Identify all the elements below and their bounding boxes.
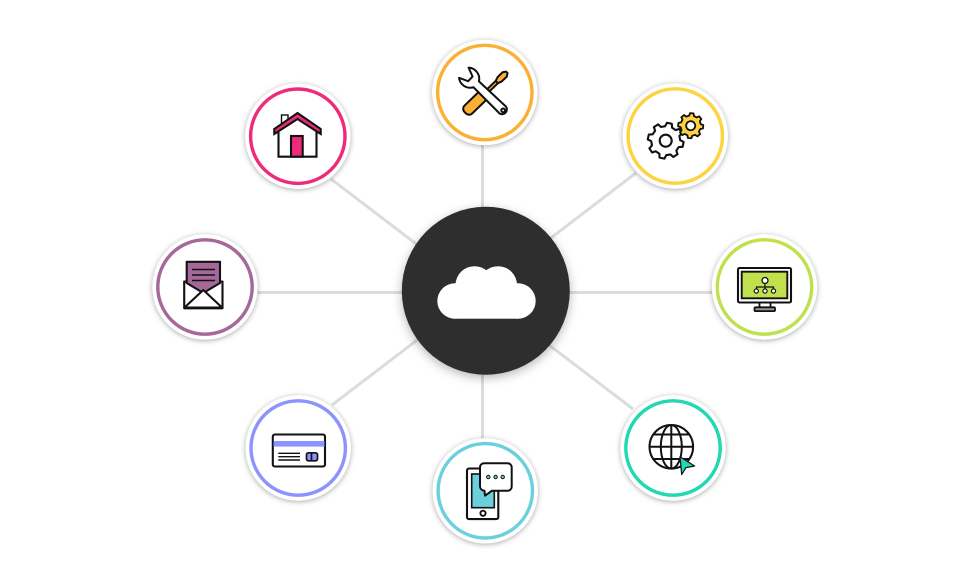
icon: screwdriver — [461, 68, 511, 117]
node: credit card — [246, 395, 351, 501]
icon: credit card — [273, 434, 325, 466]
icon: open envelope with letter — [184, 262, 222, 308]
node: settings gears — [623, 83, 728, 189]
node: home — [245, 84, 350, 189]
central cloud hub — [402, 207, 570, 375]
node: mail — [152, 234, 258, 340]
node: tools — [432, 40, 537, 145]
icon: wrench — [457, 66, 513, 119]
icon: cursor arrow — [680, 457, 695, 475]
icon: cloud — [437, 266, 536, 319]
icon: computer monitor with network — [738, 268, 791, 311]
icon: house — [274, 113, 321, 157]
node: mobile chat — [433, 438, 538, 543]
connector lines — [255, 140, 715, 442]
node: monitor — [712, 234, 817, 340]
icon: small gear — [677, 112, 704, 139]
node: globe — [620, 395, 726, 501]
icon: globe — [650, 425, 693, 469]
icon: large gear — [645, 120, 687, 162]
icon: phone — [467, 468, 498, 519]
icon: speech bubble — [480, 463, 512, 496]
